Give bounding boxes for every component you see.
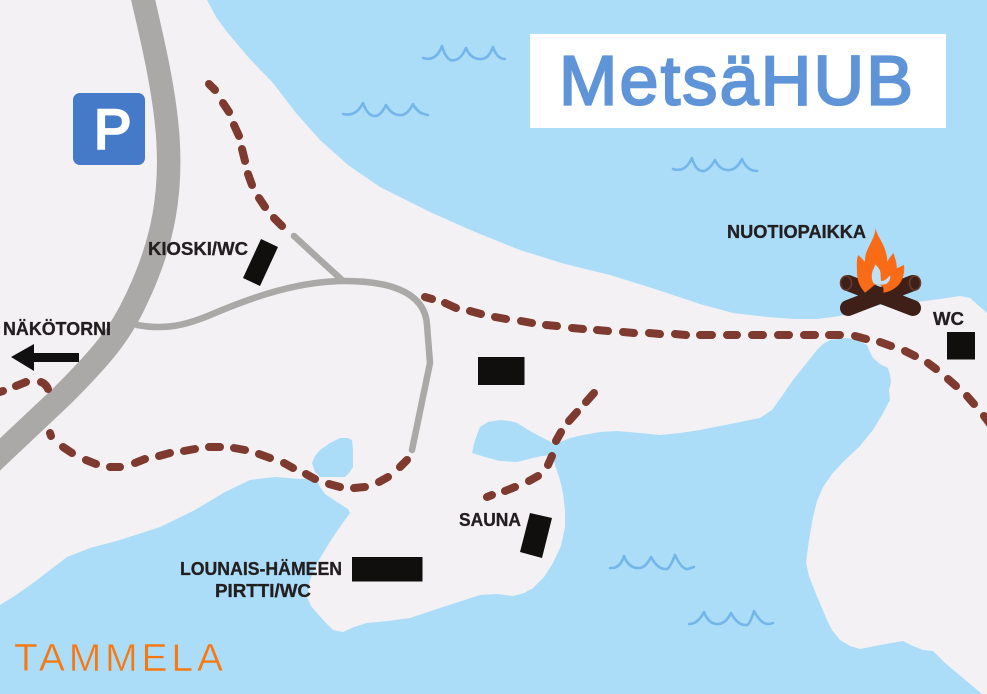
label: kioski/wc: KIOSKI/WC xyxy=(148,239,248,259)
water: southern lake xyxy=(0,338,982,694)
water: inlet by the sauna xyxy=(472,420,553,462)
building: pirtti xyxy=(352,557,422,582)
icon: parking xyxy=(73,93,145,165)
hiking trails xyxy=(0,84,987,497)
building: wc xyxy=(947,332,975,360)
label: lounais-hämeen pirtti/wc xyxy=(180,559,342,601)
building: kiosk xyxy=(243,239,278,286)
waves xyxy=(343,46,773,625)
label: wc: WC xyxy=(933,309,964,329)
label: nuotiopaikka: NUOTIOPAIKKA xyxy=(727,222,866,242)
building: sauna xyxy=(520,513,552,558)
label: lounais-hämeen pirtti/wc: LOUNAIS-HÄMEEN xyxy=(180,559,342,579)
label: näkötorni: NÄKÖTORNI xyxy=(3,319,111,339)
arrow: to observation tower xyxy=(11,344,79,371)
title box: MetsäHUB xyxy=(559,42,913,120)
building: centre xyxy=(478,357,524,385)
label: lounais-hämeen pirtti/wc: PIRTTI/WC xyxy=(215,581,311,601)
water: northern lake xyxy=(207,0,987,319)
icon: campfire xyxy=(840,228,920,308)
main road xyxy=(0,0,169,462)
access roads xyxy=(137,236,430,450)
icon: parking: P xyxy=(94,98,131,160)
place name: tammela: TAMMELA xyxy=(14,637,223,680)
water: small pond xyxy=(312,438,353,477)
label: sauna: SAUNA xyxy=(459,510,521,530)
